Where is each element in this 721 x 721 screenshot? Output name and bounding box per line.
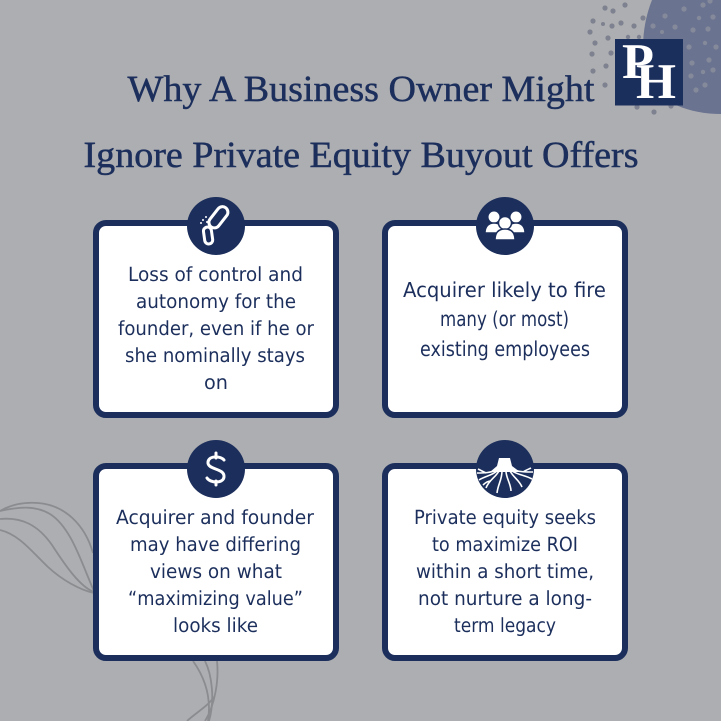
title: Ignore Private Equity Buyout Offers bbox=[84, 135, 638, 176]
text: employees bbox=[403, 278, 606, 361]
logo: PH monogram bbox=[615, 33, 683, 109]
title bbox=[84, 69, 638, 176]
panel: employees bbox=[385, 197, 625, 415]
text: long-term legacy: to maximize ROI bbox=[432, 533, 578, 556]
text: maximizing value: looks like bbox=[173, 614, 258, 637]
text: maximizing value bbox=[116, 506, 315, 637]
text: maximizing value: Acquirer and founder bbox=[116, 506, 315, 529]
text: loss of control: on bbox=[204, 371, 228, 394]
text: long-term legacy bbox=[414, 506, 596, 637]
decorative curved lines, bottom left bbox=[0, 503, 218, 721]
text: employees: many (or most) bbox=[440, 307, 569, 331]
text: loss of control: autonomy for the bbox=[136, 290, 296, 313]
icon: dollar sign bbox=[187, 440, 245, 498]
text: maximizing value: may have differing bbox=[130, 533, 301, 556]
text: maximizing value: views on what bbox=[150, 560, 282, 583]
text: long-term legacy: term legacy bbox=[454, 614, 556, 637]
text: maximizing value: “maximizing value” bbox=[128, 587, 303, 610]
panel: long-term legacy bbox=[385, 440, 625, 658]
decorative circle with dots, top right bbox=[587, 0, 721, 115]
title: Why A Business Owner Might bbox=[128, 69, 595, 110]
logo: PH monogram: P bbox=[622, 33, 654, 89]
panel: maximizing value bbox=[96, 440, 336, 658]
text: long-term legacy: not nurture a long- bbox=[418, 587, 592, 610]
text: employees: Acquirer likely to fire bbox=[403, 278, 606, 302]
panel: loss of control bbox=[96, 197, 336, 415]
icon: group of people bbox=[476, 197, 534, 255]
logo: PH monogram: H bbox=[636, 53, 676, 109]
icon: tree stump roots bbox=[476, 440, 534, 498]
text: long-term legacy: Private equity seeks bbox=[414, 506, 596, 529]
text: long-term legacy: within a short time, bbox=[416, 560, 594, 583]
text: employees: existing employees bbox=[420, 337, 590, 361]
icon: broken chain link bbox=[187, 197, 245, 255]
text: loss of control: Loss of control and bbox=[128, 263, 303, 286]
text: loss of control: founder, even if he or bbox=[118, 317, 315, 340]
text: loss of control: she nominally stays bbox=[125, 344, 305, 367]
text: loss of control bbox=[118, 263, 315, 394]
